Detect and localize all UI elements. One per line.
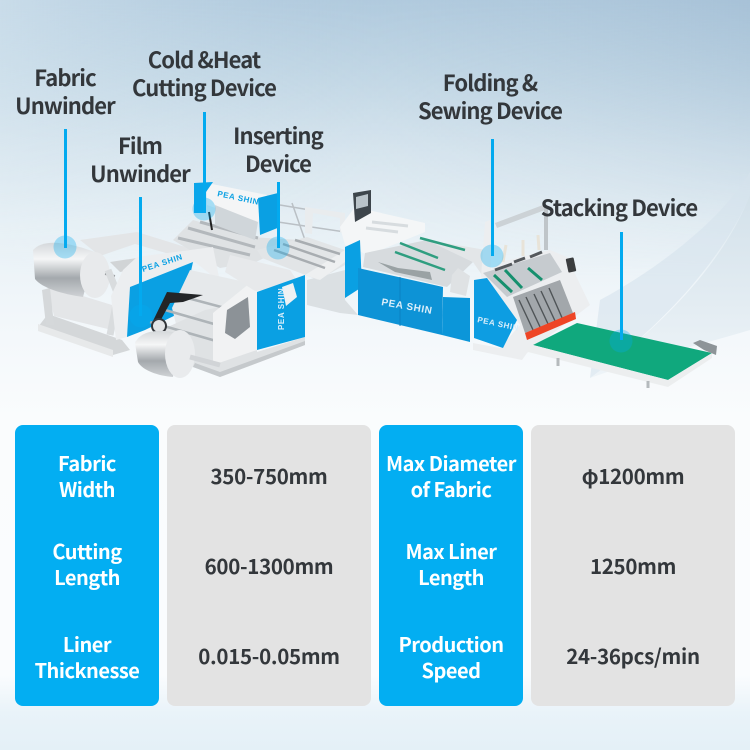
- spec name: liner thickness: [35, 629, 140, 684]
- machine: fabric unwinder: [33, 232, 195, 357]
- spec name: fabric width: [58, 448, 116, 503]
- callout marker: cutting device: [192, 112, 216, 220]
- label: film unwinder: Film: [118, 129, 162, 161]
- spec name: max liner length: Length: [418, 562, 484, 591]
- spec name: production speed: Speed: [422, 655, 480, 684]
- callout marker: fabric unwinder: [54, 129, 76, 258]
- spec name: cutting length: [52, 536, 122, 591]
- label: fabric unwinder: Unwinder: [15, 89, 115, 121]
- label: cold and heat cutting device: Cold &Heat: [148, 43, 260, 75]
- value: liner thickness: 0.015-0.05mm: [198, 640, 340, 670]
- label: folding and sewing device: Folding &: [443, 66, 537, 98]
- brand marks: PEA SHIN: [217, 189, 260, 207]
- label: inserting device: Inserting: [233, 119, 323, 151]
- spec name: cutting length: Length: [54, 562, 120, 591]
- label: film unwinder: [90, 129, 191, 189]
- spec name: production speed: [398, 629, 504, 684]
- value: production speed: 24-36pcs/min: [566, 640, 700, 670]
- machine: inserting section and console: [257, 190, 425, 315]
- spec name: max diameter: of Fabric: [411, 474, 491, 503]
- value: max diameter: φ1200mm: [582, 460, 684, 490]
- label: folding and sewing device: Sewing Device: [418, 94, 562, 126]
- label: fabric unwinder: [15, 61, 116, 121]
- panel: spec values left: [167, 425, 371, 706]
- machine: folding and sewing section: [358, 238, 486, 342]
- brand marks: PEA SHIN: [141, 252, 184, 274]
- spec name: max diameter: [386, 448, 516, 503]
- spec name: max diameter: Max Diameter: [386, 448, 516, 477]
- spec name: fabric width: Width: [59, 474, 115, 503]
- brand marks: PEA SHIN: [477, 315, 520, 333]
- spec name: cutting length: Cutting: [52, 536, 122, 565]
- callout marker: folding device: [480, 139, 504, 268]
- label: stacking device: Stacking Device: [541, 191, 697, 223]
- callout marker: film unwinder: [130, 197, 152, 328]
- spec name: liner thickness: Liner: [63, 629, 111, 658]
- spec name: max liner length: Max Liner: [406, 536, 496, 565]
- machine: cutting section: [173, 182, 345, 268]
- brand marks: [141, 189, 520, 333]
- spec name: production speed: Production: [398, 629, 504, 658]
- label: inserting device: Device: [245, 147, 311, 179]
- brand marks: PEA SHIN: [277, 288, 286, 330]
- panel: spec values right: [531, 425, 735, 706]
- label: folding and sewing device: [418, 66, 562, 126]
- label: film unwinder: Unwinder: [90, 157, 190, 189]
- panel: spec names left: [15, 425, 159, 706]
- machine: stacking section: [473, 205, 590, 360]
- value: max liner length: 1250mm: [590, 550, 676, 580]
- callout marker: inserting device: [266, 182, 290, 260]
- label: cold and heat cutting device: [132, 43, 276, 103]
- brand marks: PEA SHIN: [380, 297, 433, 317]
- callout marker: stacking device: [610, 232, 632, 352]
- machine: film unwinder: [111, 247, 305, 378]
- spec name: fabric width: Fabric: [58, 448, 116, 477]
- label: cold and heat cutting device: Cutting Device: [132, 71, 276, 103]
- panel: spec names right: [379, 425, 523, 706]
- value: fabric width: 350-750mm: [210, 460, 327, 490]
- label: fabric unwinder: Fabric: [34, 61, 96, 93]
- machine: conveyor: [528, 323, 717, 388]
- label: inserting device: [233, 119, 324, 179]
- spec name: liner thickness: Thicknesse: [35, 655, 139, 684]
- value: cutting length: 600-1300mm: [205, 550, 333, 580]
- spec name: max liner length: [406, 536, 497, 591]
